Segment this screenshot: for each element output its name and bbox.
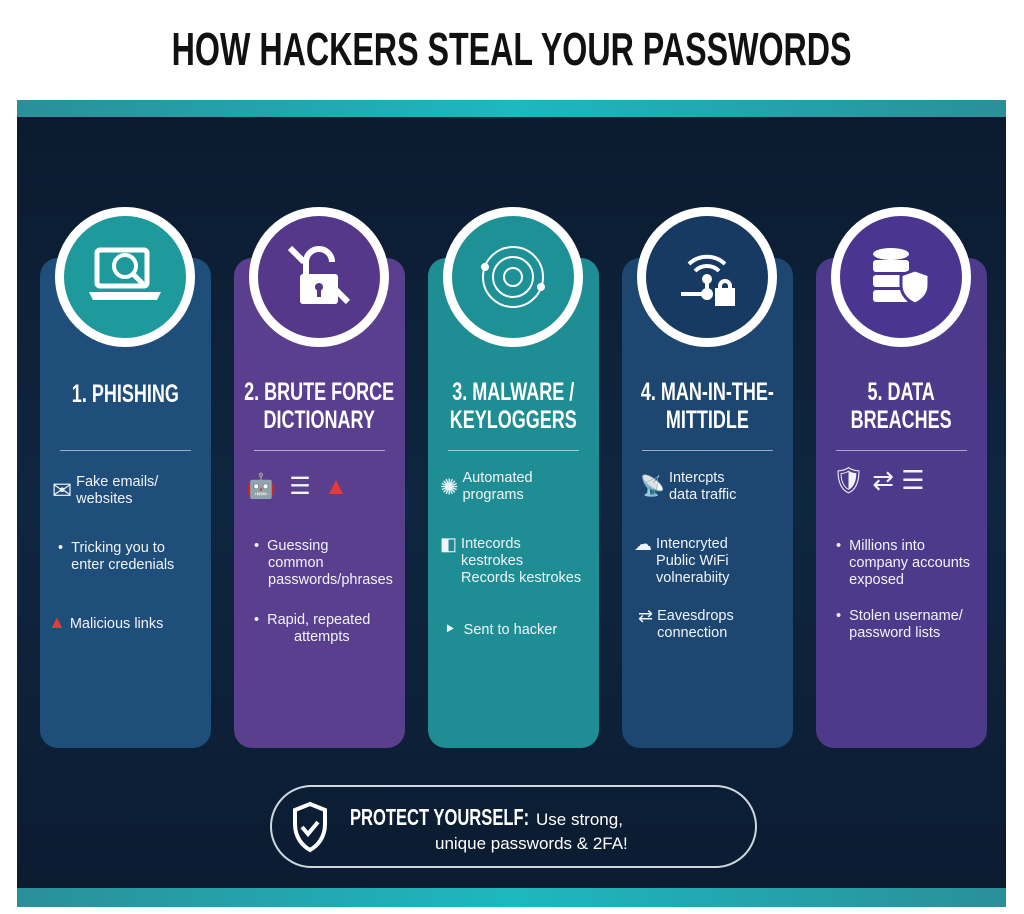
heading: KEYLOGGERS <box>450 406 577 434</box>
heading: MITTIDLE <box>666 406 749 434</box>
item: automated: ✺ <box>440 474 458 500</box>
item: millions <box>836 538 970 588</box>
item: malicious links: ▲ Malicious links <box>48 612 163 632</box>
title: HOW HACKERS STEAL YOUR PASSWORDS <box>172 23 852 75</box>
item: guessing <box>254 538 393 588</box>
item: stolen: password lists <box>849 625 940 641</box>
item: public wifi <box>634 534 730 586</box>
item: intercepts: 📡 <box>640 476 665 498</box>
heading: 5. DATA <box>868 378 935 406</box>
callout text <box>350 804 628 853</box>
item: millions: exposed <box>849 572 904 588</box>
card 1: phishing <box>40 258 211 748</box>
item: sent to hacker: ⯈ Sent to hacker <box>444 622 557 638</box>
card 4: MITM <box>622 258 793 748</box>
item: automated: programs <box>462 487 524 503</box>
item: rapid <box>254 612 370 645</box>
callout text: Use strong, <box>536 810 623 829</box>
item: public wifi: Public WiFi <box>656 553 729 569</box>
item: tricking: • <box>58 540 63 556</box>
item: records keystrokes: Records kestrokes <box>461 570 581 586</box>
item: eavesdrops: connection <box>657 625 727 641</box>
icon: malware swirl <box>443 207 583 347</box>
heading: 1. PHISHING <box>72 380 179 408</box>
card 5: data breaches <box>816 258 987 748</box>
item: fake emails: ✉ <box>52 478 72 504</box>
card 2: brute force <box>234 258 405 748</box>
icons row: robot, list, warning: 🤖 ☰ ▲ <box>246 473 348 500</box>
heading <box>851 378 952 434</box>
heading <box>450 378 577 434</box>
item: rapid: • Rapid, repeated <box>254 612 370 628</box>
item: guessing: passwords/phrases <box>268 572 393 588</box>
icon: laptop magnifier <box>55 207 195 347</box>
item: intercepts: data traffic <box>669 487 736 503</box>
callout text: PROTECT YOURSELF: <box>350 804 529 830</box>
heading <box>244 378 395 434</box>
heading: 3. MALWARE / <box>452 378 574 406</box>
item: millions: • <box>836 538 841 554</box>
icons row: 🛡 ⇄ ☰ <box>832 465 925 495</box>
item: automated: Automated <box>462 470 533 486</box>
heading <box>641 378 774 434</box>
callout: protect yourself <box>270 785 757 868</box>
item: automated <box>440 470 533 503</box>
item: guessing: • Guessing <box>254 538 328 554</box>
heading: DICTIONARY <box>264 406 375 434</box>
heading: 2. BRUTE FORCE <box>244 378 395 406</box>
item: stolen: Stolen username/ <box>849 608 963 624</box>
card 3: malware <box>428 258 599 748</box>
item: records keystrokes: kestrokes <box>461 553 523 569</box>
item: records keystrokes: ◧ <box>440 534 457 554</box>
item: tricking: Tricking you to enter credenials <box>71 540 174 573</box>
heading: 4. MAN-IN-THE- <box>641 378 774 406</box>
item: eavesdrops <box>638 606 734 641</box>
icon: database shield <box>831 207 971 347</box>
item: rapid: attempts <box>294 629 350 645</box>
item: intercepts: Intercpts <box>669 470 725 486</box>
heading: BREACHES <box>851 406 952 434</box>
item: fake emails: Fake emails/ websites <box>76 474 158 507</box>
item: eavesdrops: ⇄ <box>638 606 653 626</box>
item: stolen: • <box>836 608 841 624</box>
item: millions: company accounts <box>849 555 970 571</box>
item: records keystrokes <box>440 534 581 586</box>
icon: wifi lock <box>637 207 777 347</box>
item: eavesdrops: Eavesdrops <box>657 608 734 624</box>
item: stolen <box>836 608 963 641</box>
item: intercepts <box>640 470 736 503</box>
callout text: unique passwords & 2FA! <box>435 834 628 853</box>
item: public wifi: ☁ <box>634 534 652 554</box>
item: records keystrokes: Intecords <box>461 536 521 552</box>
item: public wifi: Intencryted <box>656 536 728 552</box>
icon: shield check <box>293 802 327 852</box>
icon: lock with chain <box>249 207 389 347</box>
item: public wifi: volnerabiity <box>656 570 729 586</box>
item: guessing: common <box>268 555 324 571</box>
item: millions: Millions into <box>849 538 925 554</box>
